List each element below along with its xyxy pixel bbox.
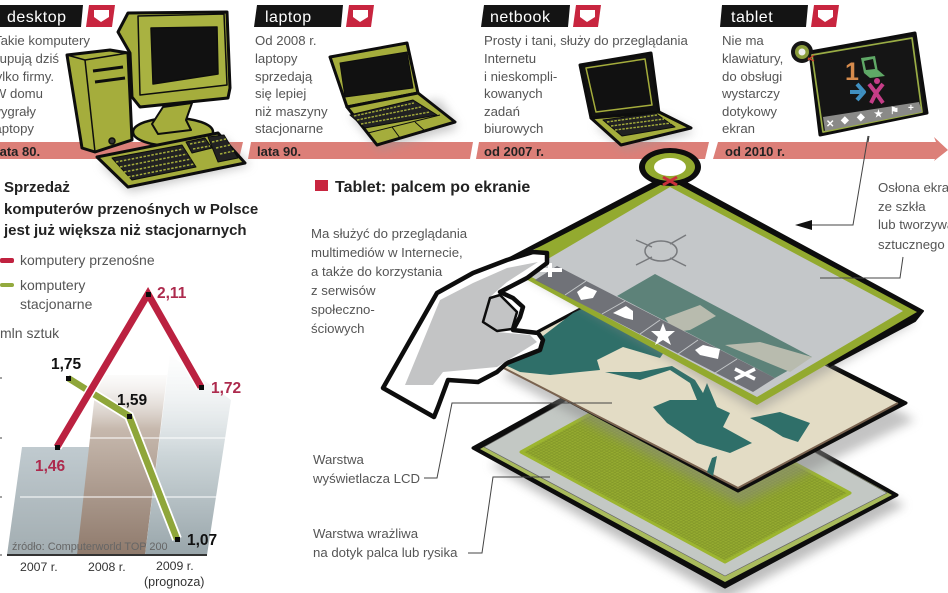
- panel: tablet: [720, 5, 927, 159]
- text: tablet purpose: [311, 226, 468, 336]
- text: netbook description: biurowych: [484, 121, 543, 136]
- legend: [0, 252, 155, 312]
- legend: stacjonarne: [20, 296, 93, 312]
- text: desktop description: [0, 33, 90, 136]
- x axis labels: (prognoza): [144, 575, 204, 589]
- tag: desktop: desktop: [7, 9, 67, 26]
- callout: cover text: [820, 180, 948, 278]
- data values: 1,72: [211, 380, 241, 397]
- icon: red arrow netbook: [573, 5, 601, 27]
- icon: red arrow laptop: [346, 5, 374, 27]
- tag: tablet: tablet: [731, 9, 773, 26]
- glass loop: [639, 148, 701, 186]
- toolbar strip: [535, 263, 775, 392]
- text: netbook description: kowanych: [484, 86, 543, 101]
- callout: touch layer: [313, 477, 550, 560]
- icon: tablet: ★: [874, 109, 883, 120]
- panel: desktop: [0, 5, 250, 192]
- legend: komputery: [20, 277, 85, 293]
- text: laptop description: [255, 33, 328, 136]
- data values: 1,07: [187, 532, 217, 549]
- callout: touch layer: Warstwa wrażliwa: [313, 526, 419, 541]
- text: tablet purpose: społeczno-: [311, 302, 375, 317]
- icon: laptop: [330, 43, 458, 150]
- icon: tablet: [791, 33, 927, 142]
- text: tablet description: Nie ma: [722, 33, 764, 48]
- x axis labels: [20, 559, 204, 589]
- icon: red arrow tablet: [811, 5, 839, 27]
- callout: LCD layer: Warstwa: [313, 452, 364, 467]
- text: laptop description: się lepiej: [255, 86, 306, 101]
- text: tablet description: dotykowy: [722, 104, 777, 119]
- text: tablet description: do obsługi: [722, 69, 782, 84]
- data values: 1,75: [51, 356, 82, 373]
- callout: cover from tablet icon: [795, 136, 868, 230]
- text: tablet description: [721, 33, 783, 136]
- x axis labels: 2008 r.: [88, 560, 126, 574]
- text: tablet purpose: ściowych: [311, 321, 364, 336]
- chart heading: komputerów przenośnych w Polsce: [4, 201, 258, 218]
- text: netbook description: zadań: [484, 104, 520, 119]
- date: od 2010: od 2010 r.: [725, 144, 785, 159]
- x axis labels: 2009 r.: [156, 559, 194, 573]
- text: laptop description: laptopy: [255, 51, 298, 66]
- source: źródło: Computerworld TOP 200: [12, 541, 168, 553]
- icon: tablet: ◆: [856, 112, 865, 123]
- date: lata 90: lata 90.: [257, 144, 301, 159]
- green series: [68, 378, 177, 539]
- text: tablet purpose: z serwisów: [311, 283, 376, 298]
- callout: LCD layer: wyświetlacza LCD: [312, 471, 420, 486]
- icon: tablet: 1: [845, 58, 859, 86]
- text: netbook description: Internetu: [484, 51, 536, 66]
- icon: hand: [383, 252, 547, 417]
- target mark: [636, 235, 686, 266]
- data markers: [55, 292, 204, 542]
- panel: laptop: [254, 5, 458, 159]
- icon: tablet: +: [908, 103, 914, 114]
- text: tablet purpose: multimediów w Internecie,: [311, 245, 463, 260]
- callout: LCD layer: [312, 403, 612, 486]
- icon: tablet: ⚑: [890, 106, 899, 117]
- icon: desktop computer: [67, 12, 250, 192]
- text: tablet description: klawiatury,: [722, 51, 783, 66]
- heading: tablet section: Tablet: palcem po ekranie: [335, 179, 530, 196]
- legend: komputery przenośne: [20, 252, 155, 268]
- text: tablet description: wystarczy: [721, 86, 780, 101]
- diagram: tablet layers: [383, 148, 923, 593]
- icon: tablet: ✕: [826, 119, 834, 130]
- text: tablet purpose: a także do korzystania: [311, 264, 443, 279]
- chart heading: [3, 179, 258, 239]
- map seen through glass: [617, 274, 812, 378]
- text: netbook description: Prosty i tani, służy do przeglądania: [484, 33, 688, 48]
- text: netbook description: [484, 33, 688, 136]
- tag: netbook: netbook: [490, 9, 551, 26]
- icon: tablet: ◆: [840, 115, 849, 126]
- date: od 2007: od 2007 r.: [484, 144, 544, 159]
- data values: 1,46: [35, 458, 66, 475]
- text: netbook description: i nieskompli-: [484, 69, 557, 84]
- data values: 2,11: [157, 285, 187, 302]
- text: tablet description: ekran: [722, 121, 755, 136]
- tag: tablet: [720, 5, 808, 27]
- axis unit: mln sztuk: [0, 325, 60, 341]
- icon: red arrow desktop: [86, 5, 115, 27]
- tag: netbook: [481, 5, 570, 27]
- chart heading: Sprzedaż: [4, 179, 70, 196]
- panel: sales chart: [0, 179, 258, 589]
- tag: desktop: [0, 5, 83, 27]
- callout: cover text: sztucznego: [878, 237, 945, 252]
- layer: LCD display: [488, 273, 915, 505]
- icon: netbook: [580, 53, 695, 150]
- text: laptop description: niż maszyny: [255, 104, 328, 119]
- chart: lines over slanted columns: [0, 285, 241, 589]
- layer: touch sensor: [473, 353, 905, 593]
- callout: touch layer: na dotyk palca lub rysika: [313, 545, 458, 560]
- red series: [57, 294, 201, 447]
- panel: netbook: [481, 5, 695, 159]
- data values: [35, 285, 241, 549]
- x axis labels: 2007 r.: [20, 560, 58, 574]
- text: laptop description: stacjonarne: [255, 121, 323, 136]
- chart heading: jest już większa niż stacjonarnych: [3, 222, 247, 239]
- text: laptop description: Od 2008 r.: [255, 33, 317, 48]
- timeline band: [0, 137, 948, 161]
- text: tablet purpose: Ma służyć do przeglądania: [311, 226, 468, 241]
- layer: glass cover: [502, 148, 923, 412]
- map: water and coasts: [505, 278, 810, 476]
- data values: 1,59: [117, 392, 148, 409]
- tag: laptop: laptop: [265, 9, 312, 26]
- text: laptop description: sprzedają: [255, 69, 313, 84]
- callout: cover text: ze szkła: [878, 199, 926, 214]
- tag: laptop: [254, 5, 343, 27]
